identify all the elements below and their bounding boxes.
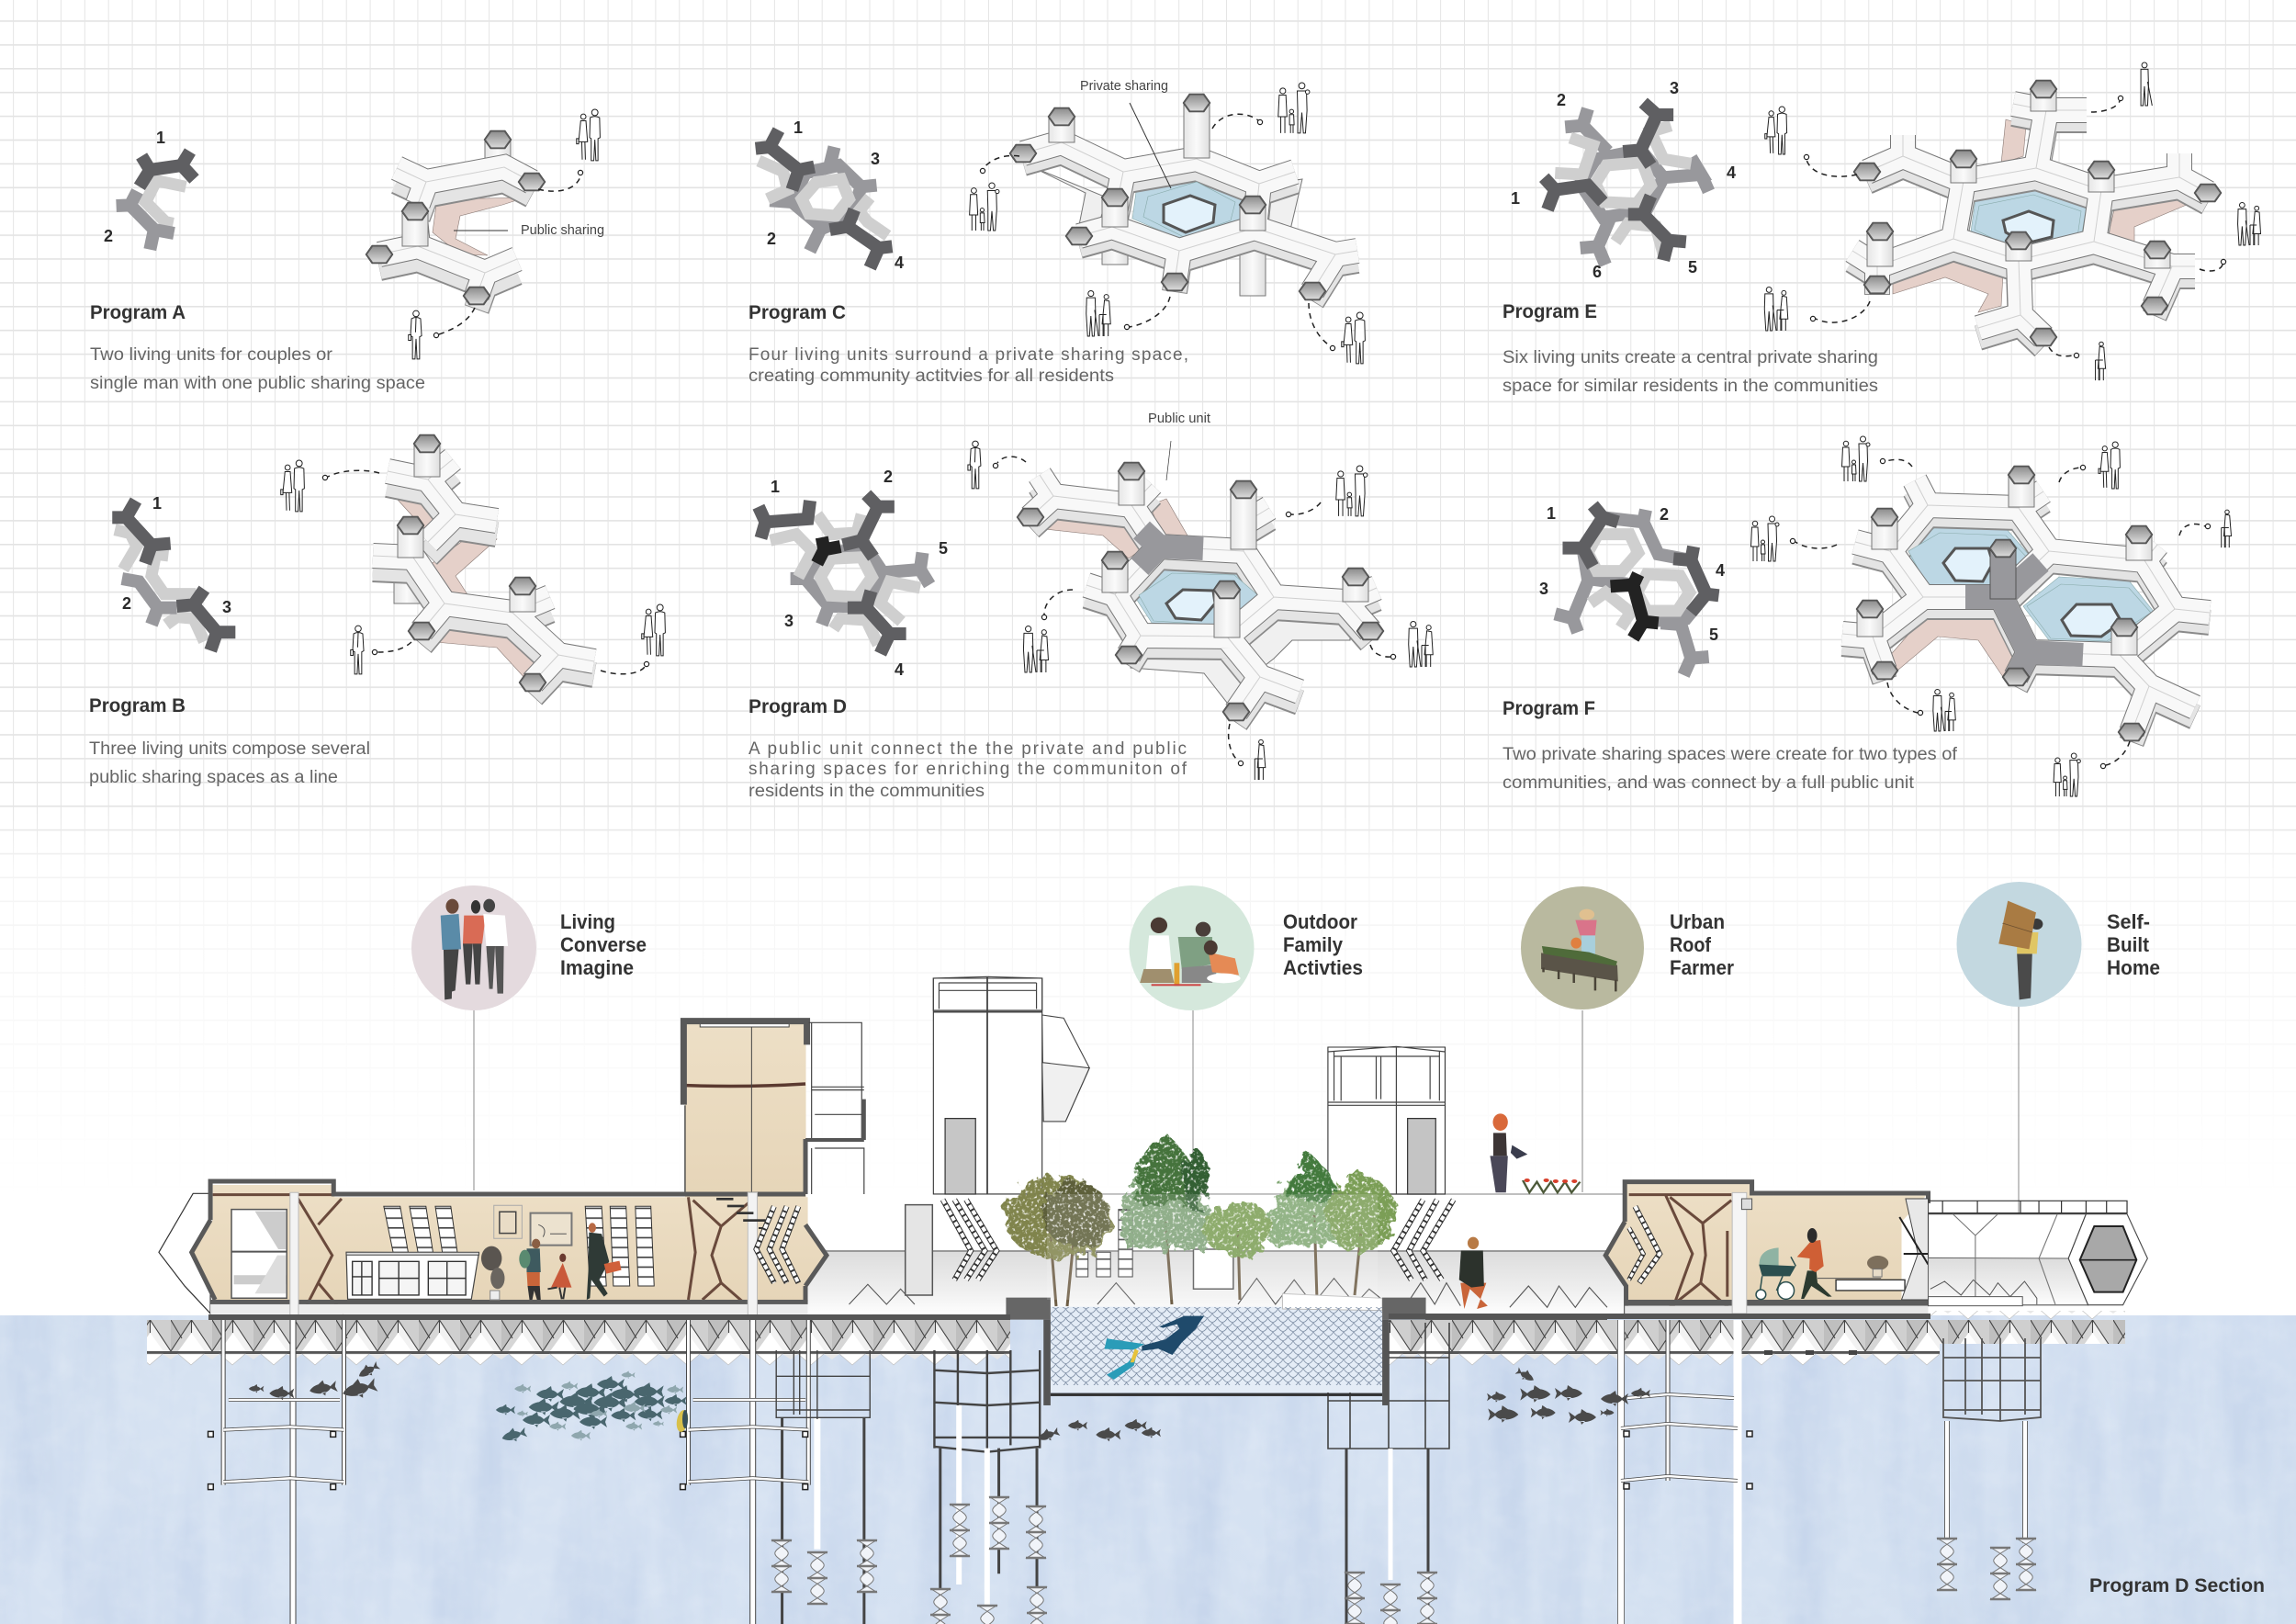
program D numbers xyxy=(771,468,948,679)
program C unit diagram xyxy=(756,130,892,268)
program A residents and paths xyxy=(409,109,600,359)
label: living converse imagine xyxy=(560,910,647,979)
woman pushing pram xyxy=(1797,1228,1832,1299)
walls and slabs xyxy=(192,1139,827,1314)
illustration: three people talking xyxy=(441,899,508,999)
label: outdoor family activties: Family xyxy=(1283,933,1344,956)
program E numbers: 5 xyxy=(1688,258,1697,276)
program A description: Two living units for couples or xyxy=(90,345,333,365)
chevron windows xyxy=(756,1206,798,1283)
walls and slabs xyxy=(1605,1182,1930,1319)
column xyxy=(1732,1192,1747,1314)
program F numbers xyxy=(1539,504,1725,644)
program B axonometric module xyxy=(373,434,594,696)
program D description: sharing spaces for enriching the communiton of xyxy=(748,760,1187,779)
program F residents and paths xyxy=(1750,436,2232,796)
private sharing callout xyxy=(1080,78,1171,188)
slanted windows xyxy=(384,1206,654,1286)
program E description: space for similar residents in the communities xyxy=(1503,377,1878,396)
program D residents and paths xyxy=(968,441,1433,780)
program A axonometric module xyxy=(366,130,546,310)
program E unit diagram xyxy=(1544,103,1709,265)
second tower xyxy=(1328,1046,1445,1194)
brown braces xyxy=(213,1195,751,1314)
glass pool xyxy=(872,1293,1607,1405)
private sharing callout: Private sharing xyxy=(1080,78,1168,94)
program D description xyxy=(748,739,1187,801)
program E numbers: 6 xyxy=(1593,263,1602,281)
program C numbers: 1 xyxy=(793,118,803,137)
panel: Program B xyxy=(89,434,665,787)
main deck beam xyxy=(208,1314,1930,1320)
label: urban roof farmer: Urban xyxy=(1670,910,1725,933)
right wood module xyxy=(1605,1182,2147,1319)
program B numbers: 3 xyxy=(222,598,231,616)
label: outdoor family activties: Outdoor xyxy=(1283,910,1357,933)
label: living converse imagine: Imagine xyxy=(560,956,634,979)
column xyxy=(290,1192,298,1315)
program B residents and paths xyxy=(281,460,665,674)
program B unit diagram xyxy=(112,501,235,650)
program D numbers: 3 xyxy=(784,612,793,630)
program D description: residents in the communities xyxy=(748,782,985,801)
section title: Program D Section xyxy=(2089,1575,2265,1596)
swimming diver xyxy=(1105,1316,1204,1380)
program E numbers: 4 xyxy=(1727,164,1736,182)
public unit callout xyxy=(1148,411,1211,480)
activity callout: outdoor family xyxy=(1130,885,1363,1194)
program E residents and paths xyxy=(1764,62,2261,380)
kitchen cabinet xyxy=(346,1252,478,1299)
activity callout: living xyxy=(411,885,647,1190)
stair treads xyxy=(716,1198,768,1229)
water band xyxy=(0,1315,2296,1624)
label: living converse imagine: Living xyxy=(560,910,615,933)
program E numbers: 1 xyxy=(1511,189,1520,208)
program D numbers: 2 xyxy=(884,468,893,486)
activity callout: urban roof farmer xyxy=(1521,886,1734,1192)
program F unit diagram xyxy=(1555,505,1719,675)
label: self-built home: Home xyxy=(2107,956,2160,979)
pier set 1 xyxy=(208,1320,344,1624)
tiny drain fittings xyxy=(1764,1350,1857,1355)
label: urban roof farmer: Farmer xyxy=(1670,956,1734,979)
program F description xyxy=(1503,745,1958,793)
program C description: Four living units surround a private sharing space, xyxy=(748,345,1188,365)
program E numbers: 2 xyxy=(1557,91,1566,109)
side door xyxy=(906,1205,932,1295)
program A description: single man with one public sharing space xyxy=(90,374,425,393)
panel: Program E xyxy=(1503,62,2261,396)
glazing between modules xyxy=(1899,1199,1929,1300)
planter xyxy=(1282,1293,1382,1311)
label: living converse imagine: Converse xyxy=(560,933,647,956)
program D numbers: 4 xyxy=(895,660,904,679)
wood interior xyxy=(192,1185,827,1302)
program C numbers xyxy=(767,118,904,272)
turbines xyxy=(771,1497,2036,1624)
label: self-built home xyxy=(2107,910,2160,979)
bench and plant xyxy=(1818,1256,1905,1291)
woman in dark jacket xyxy=(1459,1237,1488,1309)
program D numbers: 5 xyxy=(939,539,948,558)
tower with stair door xyxy=(933,976,1089,1194)
trees xyxy=(1005,1132,1396,1306)
pier set 2 xyxy=(681,1320,870,1624)
program D description: A public unit connect the the private and public xyxy=(748,739,1187,759)
illustration: family playing xyxy=(1140,918,1241,986)
program D heading: Program D xyxy=(748,696,847,717)
illustration: farmer at planter xyxy=(1541,909,1618,991)
tower above module xyxy=(683,1021,807,1197)
pier frames right of pool and far right xyxy=(1328,1320,2041,1624)
gardener xyxy=(1490,1113,1580,1192)
panel: Program D xyxy=(748,411,1433,801)
program F numbers: 1 xyxy=(1547,504,1556,523)
program D axonometric module xyxy=(1017,462,1384,723)
white mid building background xyxy=(808,1194,1630,1314)
program A heading: Program A xyxy=(90,302,186,323)
program F axonometric module xyxy=(1842,466,2210,742)
program F numbers: 3 xyxy=(1539,580,1548,598)
program A numbers xyxy=(104,129,165,245)
public unit callout: Public unit xyxy=(1148,411,1211,426)
program E numbers: 3 xyxy=(1670,79,1679,97)
program E heading: Program E xyxy=(1503,301,1597,322)
program C numbers: 3 xyxy=(871,150,880,168)
left wood module xyxy=(159,1021,864,1315)
panel: Program C xyxy=(748,78,1365,386)
label: urban roof farmer: Roof xyxy=(1670,933,1712,956)
program C numbers: 4 xyxy=(895,254,904,272)
right white prism xyxy=(1929,1201,2147,1306)
figures on section xyxy=(1459,1113,1580,1309)
tower pier frame xyxy=(934,1350,1040,1624)
program F description: communities, and was connect by a full public unit xyxy=(1503,773,1915,793)
label: self-built home: Built xyxy=(2107,933,2150,956)
middle towers and courtyard xyxy=(849,976,1607,1307)
pram xyxy=(1756,1247,1795,1300)
program B numbers xyxy=(122,494,231,616)
door xyxy=(231,1210,287,1298)
program B description xyxy=(89,739,370,787)
program F description: Two private sharing spaces were create for two types of xyxy=(1503,745,1958,764)
program D numbers: 1 xyxy=(771,478,780,496)
center door xyxy=(1193,1249,1233,1289)
program D unit diagram xyxy=(759,494,929,654)
program C description xyxy=(748,345,1188,386)
underwater piers and turbines xyxy=(208,1320,1040,1624)
pool fill xyxy=(1051,1307,1382,1393)
section drawing: Program D xyxy=(147,976,2265,1624)
program F numbers: 4 xyxy=(1716,561,1725,580)
program F heading: Program F xyxy=(1503,698,1595,719)
program E axonometric module xyxy=(1852,80,2222,347)
activity callout: self-built home xyxy=(1956,882,2160,1214)
program A numbers: 1 xyxy=(156,129,165,147)
pool walls xyxy=(872,1298,1607,1405)
program B numbers: 1 xyxy=(152,494,162,513)
public sharing callout: Public sharing xyxy=(521,222,604,238)
program B heading: Program B xyxy=(89,695,186,716)
label: outdoor family activties xyxy=(1283,910,1363,979)
program C numbers: 2 xyxy=(767,230,776,248)
program A numbers: 2 xyxy=(104,227,113,245)
tree glass veil xyxy=(1047,1194,1378,1300)
program C description: creating community actitvies for all residents xyxy=(748,367,1114,386)
white end hex xyxy=(159,1193,210,1314)
program B description: Three living units compose several xyxy=(89,739,370,759)
wood interior xyxy=(1605,1183,1926,1300)
truss under deck xyxy=(147,1311,2125,1366)
program B description: public sharing spaces as a line xyxy=(89,768,338,787)
program E numbers xyxy=(1511,79,1736,281)
program B numbers: 2 xyxy=(122,594,131,613)
tent roof zigzag xyxy=(849,1279,1607,1307)
chevron window xyxy=(1629,1206,1660,1283)
pool net xyxy=(1051,1307,1382,1385)
label: outdoor family activties: Activties xyxy=(1283,956,1363,979)
program E description xyxy=(1503,348,1878,396)
panel: Program A xyxy=(90,109,604,393)
program C residents and paths xyxy=(970,83,1365,364)
program A unit diagram xyxy=(117,152,195,250)
family walking xyxy=(519,1223,622,1300)
brown braces xyxy=(1629,1195,1731,1311)
upper stair frame xyxy=(805,1022,864,1194)
program F numbers: 5 xyxy=(1709,626,1718,644)
program A description xyxy=(90,345,425,393)
label: urban roof farmer xyxy=(1670,910,1734,979)
label: self-built home: Self- xyxy=(2107,910,2150,933)
panel: Program F xyxy=(1503,436,2232,796)
program C axonometric module xyxy=(1009,94,1357,301)
plant xyxy=(481,1246,504,1300)
program F numbers: 2 xyxy=(1660,505,1669,524)
wall frames xyxy=(494,1205,571,1246)
illustration: man carrying boxes xyxy=(1998,901,2043,999)
program C heading: Program C xyxy=(748,302,846,323)
fish schools xyxy=(249,1359,1650,1445)
courtyard chevron windows xyxy=(943,1200,1454,1280)
program E description: Six living units create a central private sharing xyxy=(1503,348,1878,367)
